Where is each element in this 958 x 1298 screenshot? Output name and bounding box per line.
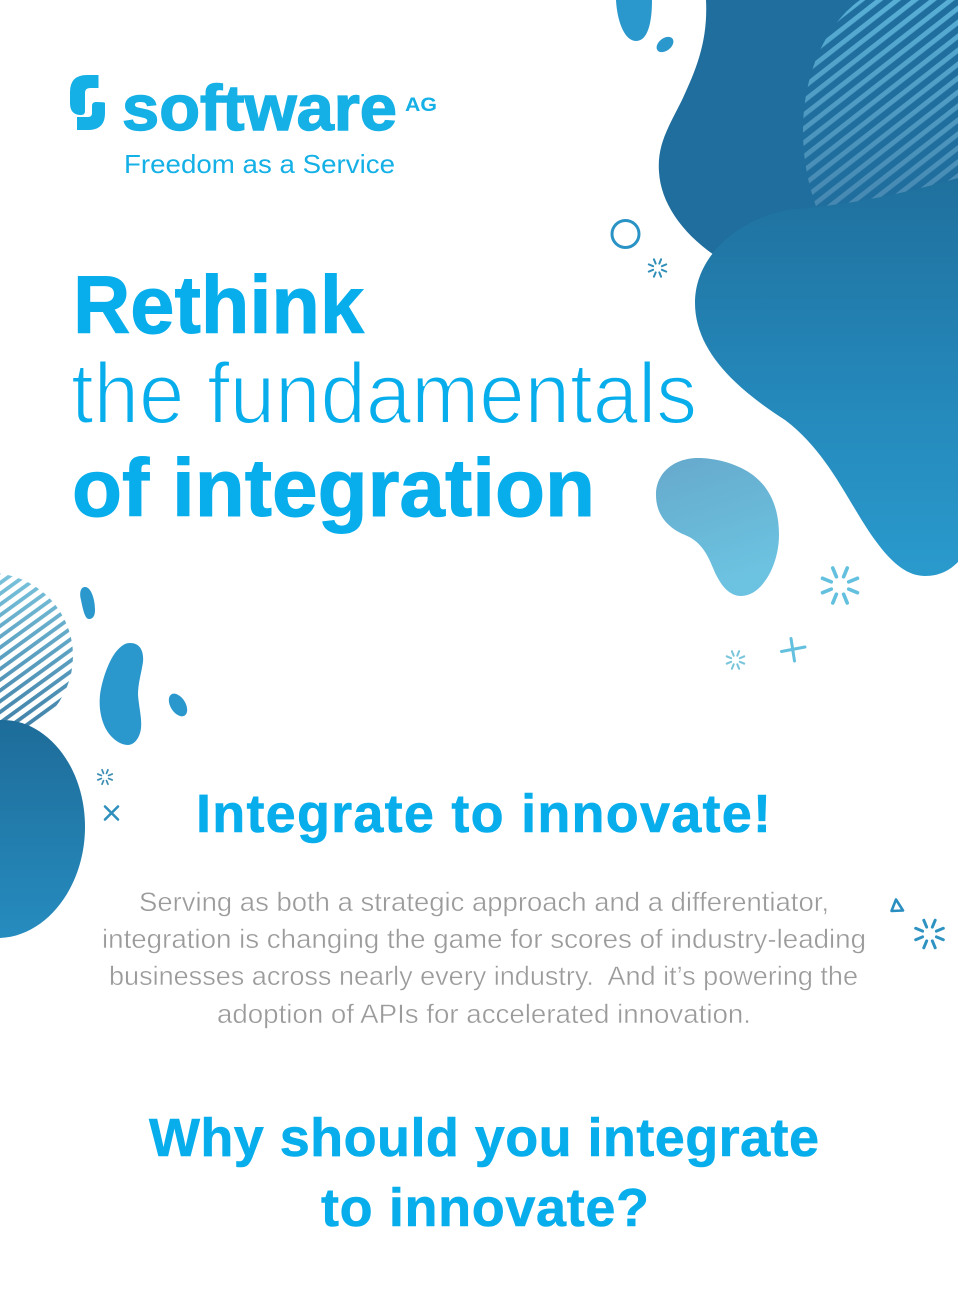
body line 2: integration is changing the game for scores of industry-leading [102,924,866,954]
blob: left dark [0,720,85,938]
icon: plus [782,638,805,661]
blob: dark top right [659,0,958,262]
blob: top tiny pebble [654,34,676,55]
icon: ring [612,220,639,248]
blob: left tiny pebble [165,690,191,720]
heading: Integrate to innovate: Integrate to innovate! [196,784,771,844]
icon: sparkle left [98,770,112,784]
body text [102,887,866,1029]
blob: left medium [100,643,143,745]
blob: light blue [656,458,779,596]
title line 1: Rethink [73,260,364,351]
logo mark [70,75,105,130]
heading: Why should you integrate to innovate [149,1108,819,1238]
icon: sparkle far right [916,920,943,948]
icon: sparkle near ring [649,259,666,277]
icon: large sparkle right [823,568,857,603]
heading line 1: Why should you integrate [149,1108,819,1168]
title line 2: the fundamentals [71,346,697,442]
icon: triangle [892,900,903,911]
icon: cross [105,806,118,820]
logo suffix: AG [405,95,437,116]
blob: large main top right [695,178,958,576]
body line 1: Serving as both a strategic approach and a differentiator, [139,887,829,917]
blob: top small drop [616,0,652,41]
logo wordmark: software [122,72,397,144]
body line 3: businesses across nearly every industry. And it’s powering the [109,961,858,991]
icon: small sparkle right [727,651,744,669]
heading line 2: to innovate? [321,1178,649,1238]
tagline: Freedom as a Service [124,149,395,179]
body line 4: adoption of APIs for accelerated innovation. [217,999,751,1029]
striped circle: left [0,573,73,739]
blob: left small drop [80,587,95,619]
title line 3: of integration [72,443,595,534]
title [71,260,697,534]
logo: Software AG [70,72,437,179]
striped circle: top right [803,0,958,212]
